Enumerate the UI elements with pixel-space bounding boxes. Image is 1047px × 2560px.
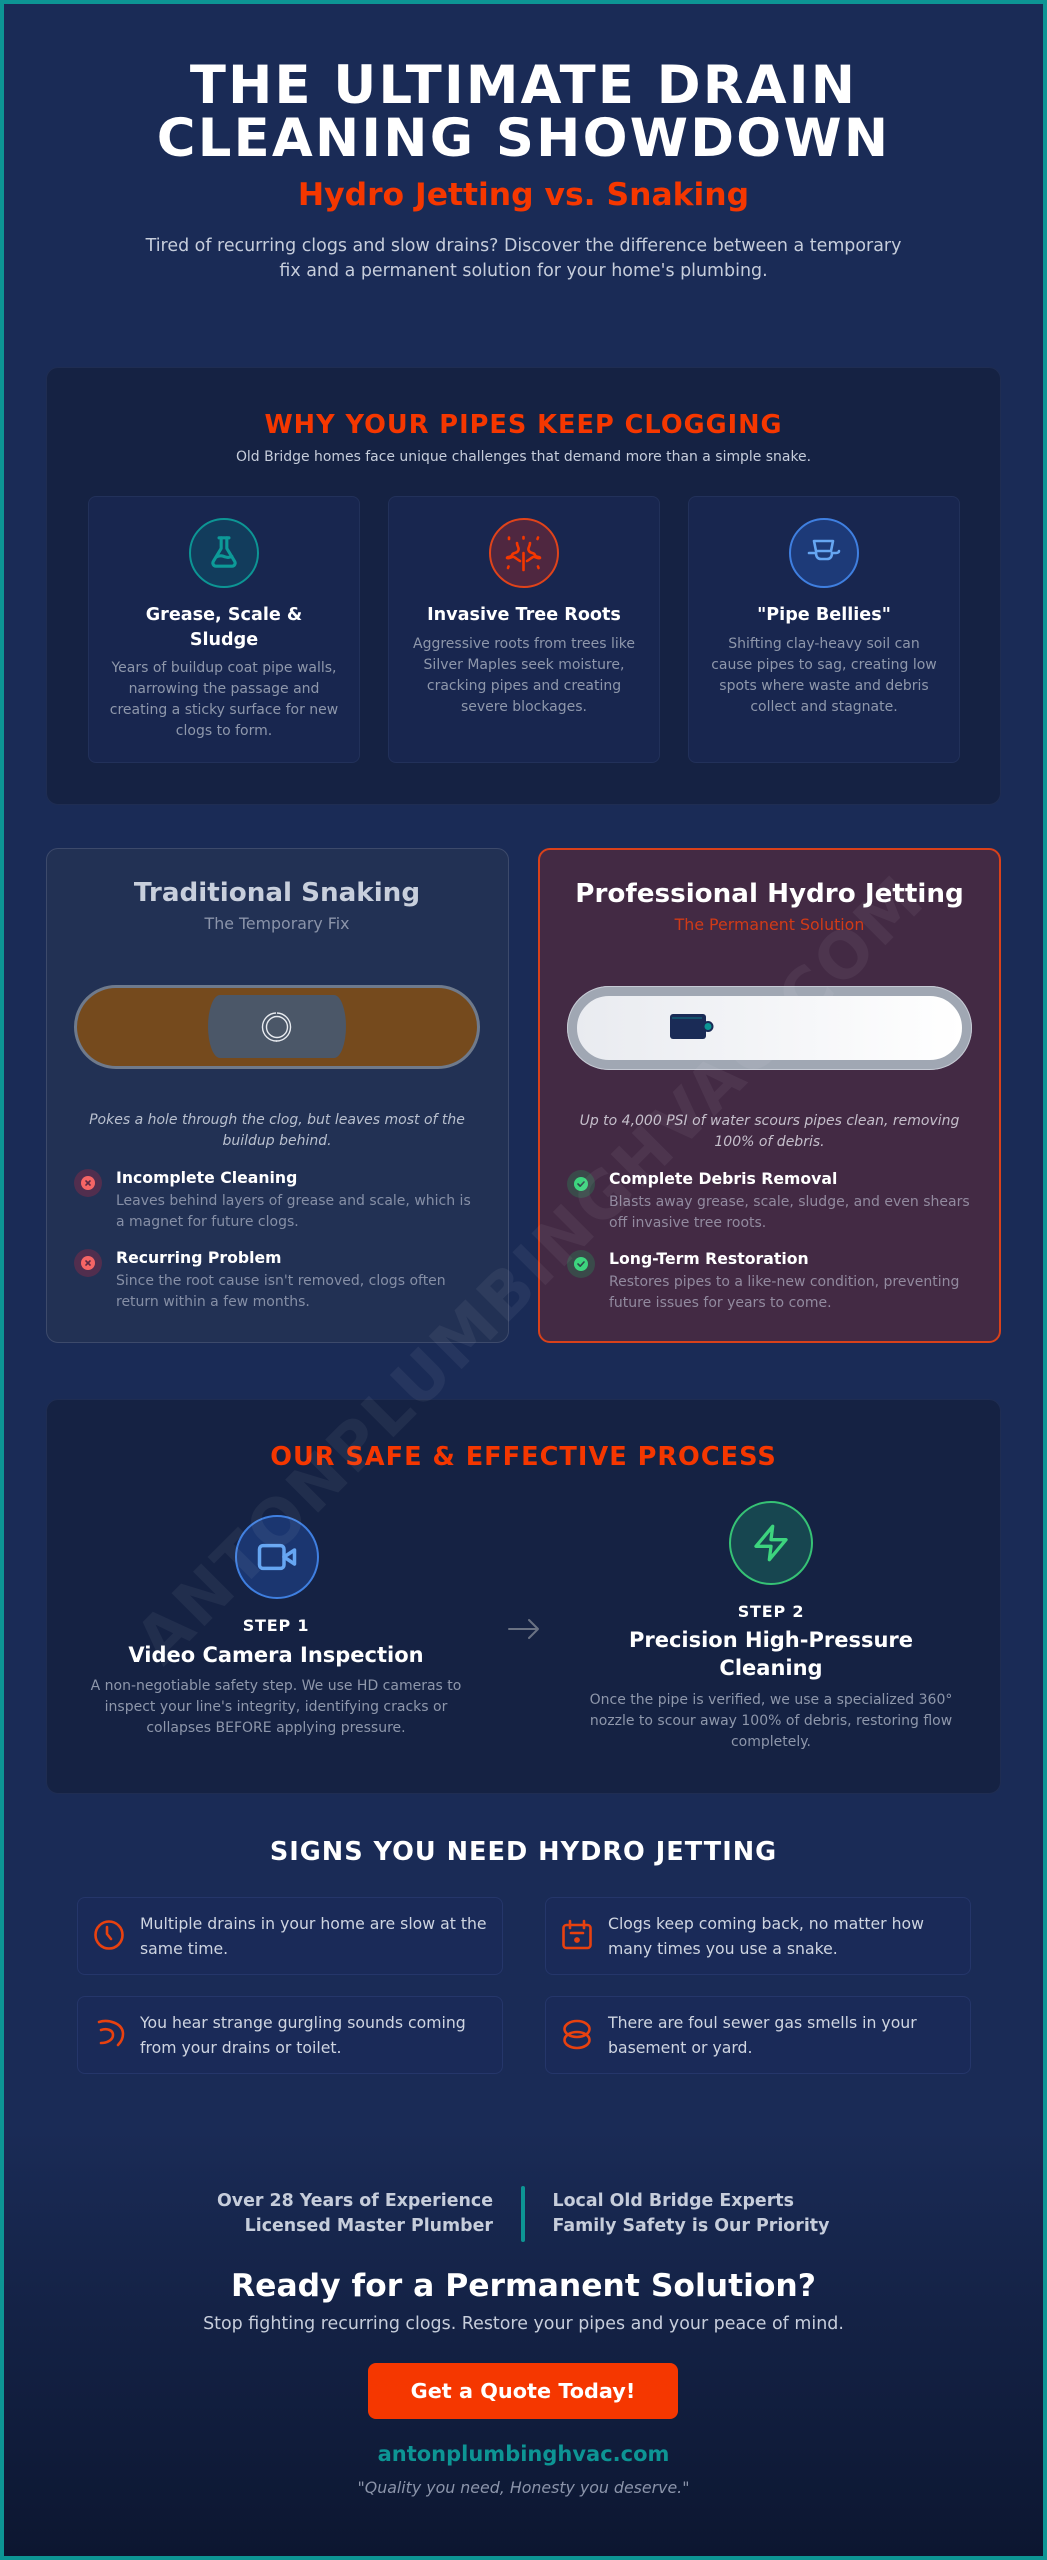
card description: severe blockages. [461,699,587,715]
footer call to action [203,2186,844,2497]
icon: x mark [74,1169,102,1197]
website link: antonplumbinghvac.com [378,2442,669,2466]
card: pipe bellies [688,496,960,763]
step title [629,1628,913,1680]
panel title: Traditional Snaking [134,878,420,908]
step label: STEP 1 [243,1616,309,1635]
intro text: fix and a permanent solution for your home's plumbing. [279,261,768,281]
item description [116,1193,471,1230]
step label: STEP 2 [738,1602,804,1621]
arrow [508,1619,539,1639]
step description: collapses BEFORE applying pressure. [146,1720,406,1736]
sign text: You hear strange gurgling sounds coming [140,2013,466,2032]
icon: video camera [235,1515,319,1599]
card title [146,605,302,650]
footer gradient background [0,2130,1047,2560]
sign text: Clogs keep coming back, no matter how [608,1914,924,1933]
card description: collect and stagnate. [750,699,898,715]
item description: Leaves behind layers of grease and scale, which is [116,1193,471,1209]
sign text: many times you use a snake. [608,1939,838,1958]
list item: long-term restoration [567,1248,959,1311]
sign: multiple slow drains [77,1897,503,1975]
sign text [140,1914,487,1958]
icon: snake coil [262,1012,292,1042]
card: grease, scale and sludge [88,496,360,763]
watermark: ANTONPLUMBINGHVAC.COM [122,861,940,1679]
card title: "Pipe Bellies" [757,605,891,625]
sign: sewer gas smells [545,1996,971,2074]
title: CLEANING SHOWDOWN [157,108,890,169]
CTA button: Get a Quote Today! [411,2379,635,2403]
sign text: same time. [140,1939,228,1958]
page header [146,55,901,281]
card description: spots where waste and debris [719,678,929,694]
card description: cracking pipes and creating [427,678,621,694]
icon: jetting nozzle [670,1014,714,1039]
panel: why your pipes keep clogging [46,367,1001,805]
intro text [146,236,901,281]
sign text [140,2013,466,2057]
section heading: SIGNS YOU NEED HYDRO JETTING [270,1837,777,1867]
remaining clog hole [208,995,346,1058]
icon: gurgling sound [98,2020,124,2046]
panel heading: WHY YOUR PIPES KEEP CLOGGING [264,410,783,440]
trust points right [552,2191,830,2236]
item description: return within a few months. [116,1294,310,1310]
step description: nozzle to scour away 100% of debris, restoring flow [590,1713,952,1729]
item heading: Incomplete Cleaning [116,1168,297,1186]
sign text: from your drains or toilet. [140,2038,342,2057]
intro text: Tired of recurring clogs and slow drains? Discover the difference between a temporary [146,236,901,256]
item description [116,1273,446,1310]
step description: Once the pipe is verified, we use a specialized 360° [590,1692,952,1708]
item description: future issues for years to come. [609,1295,832,1311]
title [157,55,890,169]
signs section [77,1837,971,2074]
item description: a magnet for future clogs. [116,1214,299,1230]
card title: Grease, Scale & [146,605,302,625]
icon: clock [94,1920,124,1950]
card title: Sludge [190,630,258,650]
card title: Invasive Tree Roots [427,605,621,625]
trust points right: Family Safety is Our Priority [552,2216,829,2236]
italic summary: buildup behind. [222,1133,332,1149]
panel title: Professional Hydro Jetting [575,879,964,909]
icon: lightning bolt [729,1501,813,1585]
card description: cause pipes to sag, creating low [711,657,937,673]
italic summary: Pokes a hole through the clog, but leaves most of the [89,1112,465,1128]
item description: Since the root cause isn't removed, clogs often [116,1273,446,1289]
item description: off invasive tree roots. [609,1215,766,1231]
sign text: basement or yard. [608,2038,752,2057]
sign text [608,2013,917,2057]
card description: creating a sticky surface for new [110,702,338,718]
divider [521,2186,524,2242]
CTA heading: Ready for a Permanent Solution? [231,2268,816,2304]
CTA text: Stop fighting recurring clogs. Restore your pipes and your peace of mind. [203,2314,844,2334]
panel: our safe and effective process [46,1399,1001,1794]
item heading: Recurring Problem [116,1248,282,1266]
step 1 [90,1515,461,1736]
step title: Cleaning [719,1656,823,1680]
subtitle: Hydro Jetting vs. Snaking [298,177,749,213]
panel heading: OUR SAFE & EFFECTIVE PROCESS [270,1442,777,1472]
sign text: There are foul sewer gas smells in your [608,2013,917,2032]
card description [711,636,937,715]
italic summary [580,1113,959,1150]
sign: gurgling sounds [77,1996,503,2074]
icon: x mark [74,1249,102,1277]
card description: Aggressive roots from trees like [413,636,635,652]
sign text: Multiple drains in your home are slow at the [140,1914,487,1933]
diagram: clogged pipe with snake [74,985,480,1069]
step description [590,1692,952,1750]
icon: sewer gas cylinders [563,2020,591,2050]
card description: narrowing the passage and [129,681,319,697]
step title: Precision High-Pressure [629,1628,913,1652]
trust points left: Licensed Master Plumber [245,2216,493,2236]
item description: Blasts away grease, scale, sludge, and even shears [609,1194,970,1210]
icon: tree roots [489,518,559,588]
list item: recurring problem [74,1248,446,1310]
panel subheading: Old Bridge homes face unique challenges that demand more than a simple snake. [236,449,811,465]
icon: sagging pipe [789,518,859,588]
step description: A non-negotiable safety step. We use HD cameras to [91,1678,461,1694]
step 2 [590,1501,952,1750]
italic summary: Up to 4,000 PSI of water scours pipes clean, removing [580,1113,959,1129]
card description: Shifting clay-heavy soil can [728,636,920,652]
list item: complete debris removal [567,1168,970,1231]
step description: completely. [731,1734,811,1750]
panel: traditional snaking [46,848,509,1343]
card: invasive tree roots [388,496,660,763]
icon: flask [189,518,259,588]
item heading: Long-Term Restoration [609,1248,809,1268]
icon: check mark [567,1170,595,1198]
panel: professional hydro jetting [538,848,1001,1343]
item heading: Complete Debris Removal [609,1168,837,1188]
tagline: "Quality you need, Honesty you deserve." [358,2478,689,2497]
card description: Years of buildup coat pipe walls, [111,660,337,676]
italic summary: 100% of debris. [714,1134,825,1150]
step description [90,1678,461,1736]
trust points left [217,2191,493,2236]
trust points right: Local Old Bridge Experts [552,2191,794,2211]
item description: Restores pipes to a like-new condition, preventing [609,1274,959,1290]
sign: clogs keep coming back [545,1897,971,1975]
panel tagline: The Permanent Solution [675,915,864,934]
card description: clogs to form. [176,723,272,739]
italic summary [89,1112,465,1149]
icon: calendar [562,1920,592,1950]
item description [609,1274,959,1311]
title: THE ULTIMATE DRAIN [190,55,857,116]
CTA button [368,2363,678,2419]
diagram: clean pipe with nozzle [567,986,972,1070]
trust points left: Over 28 Years of Experience [217,2191,493,2211]
item description [609,1194,970,1231]
panel tagline: The Temporary Fix [205,914,349,933]
card description [110,660,338,739]
sign text [608,1914,924,1958]
list item: incomplete cleaning [74,1168,471,1230]
card description [413,636,635,715]
icon: check mark [567,1250,595,1278]
step title: Video Camera Inspection [128,1643,424,1667]
step description: inspect your line's integrity, identifying cracks or [105,1699,447,1715]
card description: Silver Maples seek moisture, [424,657,624,673]
